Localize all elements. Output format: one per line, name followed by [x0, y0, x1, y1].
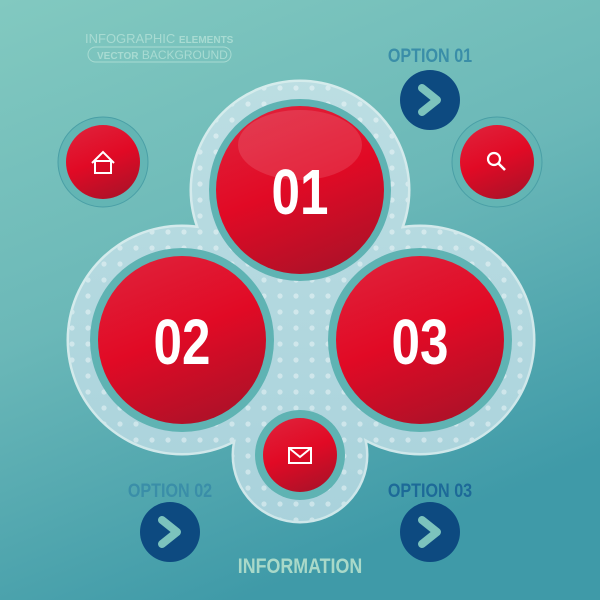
label: option 02: OPTION 02: [128, 480, 212, 501]
arrow 02: [140, 502, 200, 562]
title: INFOGRAPHIC ELEMENTS: [85, 31, 234, 46]
arrow 01: [400, 70, 460, 130]
icon: search: [452, 117, 542, 207]
icon: home: [58, 117, 148, 207]
icon: mail: [255, 410, 345, 500]
label: information: INFORMATION: [238, 555, 362, 578]
title: VECTOR BACKGROUND: [97, 48, 228, 62]
label: option 01: OPTION 01: [388, 45, 472, 66]
title: [85, 31, 234, 62]
circle 01: [209, 99, 391, 281]
arrow 03: [400, 502, 460, 562]
circle 03: [328, 248, 512, 432]
label: option 03: OPTION 03: [388, 480, 472, 501]
glass backing shape: [66, 80, 536, 524]
circle 01: 01: [272, 158, 328, 228]
circle 02: [90, 248, 274, 432]
circle 03: 03: [392, 308, 448, 378]
circle 02: 02: [154, 308, 210, 378]
